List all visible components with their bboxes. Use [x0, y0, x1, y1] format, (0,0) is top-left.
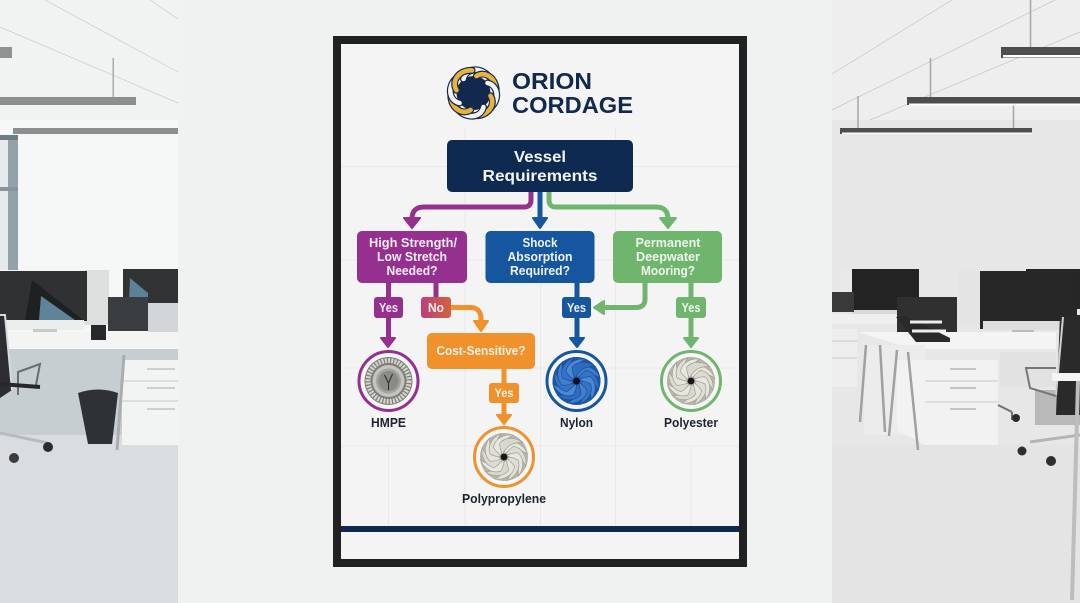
icon: nylon rope coil — [547, 352, 606, 410]
branch: strength yes to HMPE: Yes — [379, 301, 398, 315]
label: Polypropylene — [462, 492, 546, 506]
arrow: root to permanent — [549, 192, 676, 228]
outcome: polyester — [662, 352, 720, 430]
background: office scene right — [832, 0, 1080, 603]
decision: shock absorption: Absorption — [508, 250, 572, 264]
brand name: ORION — [512, 68, 592, 94]
branch: strength yes to HMPE — [374, 283, 403, 347]
label: Polyester — [664, 416, 718, 430]
decision: shock absorption — [486, 231, 594, 283]
branch: cost yes to polypropylene — [489, 369, 519, 424]
decision: permanent mooring: Permanent — [636, 236, 701, 250]
icon: HMPE rope coil — [359, 352, 418, 410]
outcome: polypropylene — [462, 428, 546, 506]
root box: vessel requirements — [447, 140, 633, 192]
icon: interlaced rope ring — [447, 66, 500, 120]
decision: permanent mooring: Deepwater — [636, 250, 700, 264]
decision: permanent mooring: Mooring? — [641, 264, 695, 278]
root box: vessel requirements: Requirements — [482, 168, 598, 185]
outcome: nylon — [547, 352, 606, 430]
branch: permanent elbow to nylon yes — [594, 283, 645, 314]
arrow: root to strength — [404, 192, 531, 228]
decision: high strength: High Strength/ — [369, 236, 458, 250]
branch: shock yes to nylon — [562, 283, 591, 347]
decision: high strength: Low Stretch — [377, 250, 447, 264]
outcome: HMPE — [359, 352, 418, 430]
branch: permanent yes to polyester: Yes — [682, 301, 701, 315]
brand name: CORDAGE — [512, 92, 633, 118]
branch: cost yes to polypropylene: Yes — [494, 386, 514, 400]
poster frame — [333, 36, 747, 567]
logo — [447, 66, 633, 120]
decision: permanent mooring — [613, 231, 722, 283]
branch: permanent yes to polyester — [676, 283, 706, 347]
background: office scene left — [0, 0, 178, 603]
arrow: root to shock — [533, 192, 547, 228]
decision: high strength — [357, 231, 467, 283]
decision: shock absorption: Shock — [522, 236, 558, 250]
branch: strength no to cost — [421, 283, 488, 331]
decision: cost sensitive: Cost-Sensitive? — [436, 344, 526, 358]
brand name — [512, 68, 633, 118]
decision: high strength: Needed? — [386, 264, 438, 278]
decision: shock absorption: Required? — [510, 264, 570, 278]
branch: strength no to cost: No — [428, 301, 444, 315]
background: central wall — [178, 0, 832, 603]
branch: shock yes to nylon: Yes — [567, 301, 586, 315]
decision: cost sensitive — [427, 333, 535, 369]
icon: polypropylene rope coil — [474, 428, 534, 486]
label: HMPE — [371, 416, 406, 430]
icon: polyester rope coil — [662, 352, 720, 410]
label: Nylon — [560, 416, 593, 430]
root box: vessel requirements: Vessel — [514, 149, 566, 166]
